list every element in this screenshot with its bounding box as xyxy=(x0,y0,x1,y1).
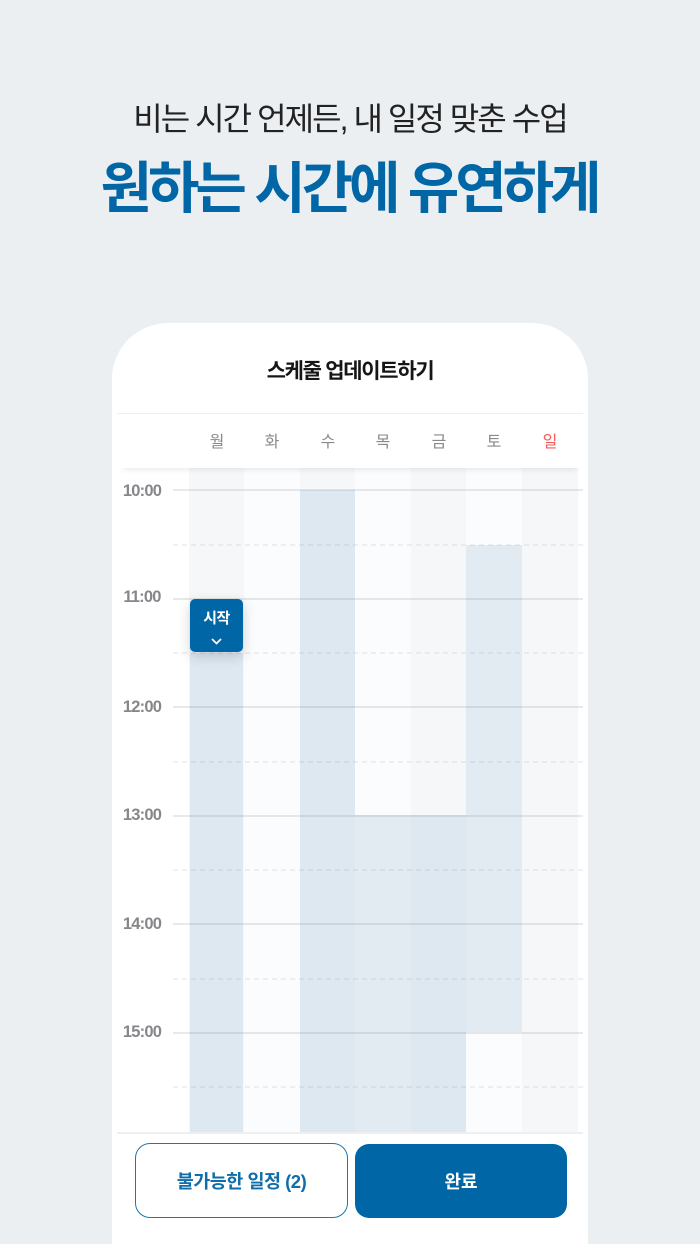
column: Monday xyxy=(189,468,244,1132)
weekday Monday: 월 xyxy=(210,434,224,451)
selected block: Friday xyxy=(411,815,466,1132)
title: 원하는 시간에 유연하게 xyxy=(101,157,597,220)
time label 10:00: 10:00 xyxy=(123,482,161,500)
time label 14:00: 14:00 xyxy=(123,915,161,933)
button: done xyxy=(355,1144,567,1218)
column: Sunday xyxy=(522,468,578,1132)
panel: phone schedule screen xyxy=(112,323,588,1244)
column: Saturday xyxy=(466,468,522,1132)
footer divider xyxy=(117,1132,583,1134)
weekday Tuesday: 화 xyxy=(265,434,279,451)
column: Tuesday xyxy=(244,468,300,1132)
weekday Friday: 금 xyxy=(432,434,446,451)
time label 13:00: 13:00 xyxy=(123,806,161,824)
weekday Saturday: 토 xyxy=(487,434,501,451)
header: weekdays xyxy=(117,413,583,468)
weekday Wednesday: 수 xyxy=(321,434,335,451)
weekday Thursday: 목 xyxy=(376,434,390,451)
selected block: Thursday xyxy=(355,815,411,1132)
selected block: Monday xyxy=(190,653,243,1132)
start marker xyxy=(190,599,243,652)
weekday Sunday: 일 xyxy=(543,434,557,451)
column: Wednesday xyxy=(300,468,355,1132)
icon: chevron down xyxy=(212,638,222,645)
time label 15:00: 15:00 xyxy=(123,1023,161,1041)
button: done: 완료 xyxy=(444,1172,478,1192)
column: Friday xyxy=(411,468,466,1132)
selected block: Wednesday xyxy=(300,490,355,1132)
screen heading: 스케줄 업데이트하기 xyxy=(267,360,433,383)
time label 12:00: 12:00 xyxy=(123,698,161,716)
time label 11:00: 11:00 xyxy=(123,588,161,606)
button: unavailable schedule: 불가능한 일정 (2) xyxy=(177,1171,306,1192)
selected block: Saturday xyxy=(466,545,522,1032)
button: unavailable schedule xyxy=(135,1143,348,1218)
footer: action bar xyxy=(112,1132,588,1244)
column: Thursday xyxy=(355,468,411,1132)
subtitle: 비는 시간 언제든, 내 일정 맞춘 수업 xyxy=(133,101,567,137)
start label: 시작 xyxy=(203,610,230,627)
